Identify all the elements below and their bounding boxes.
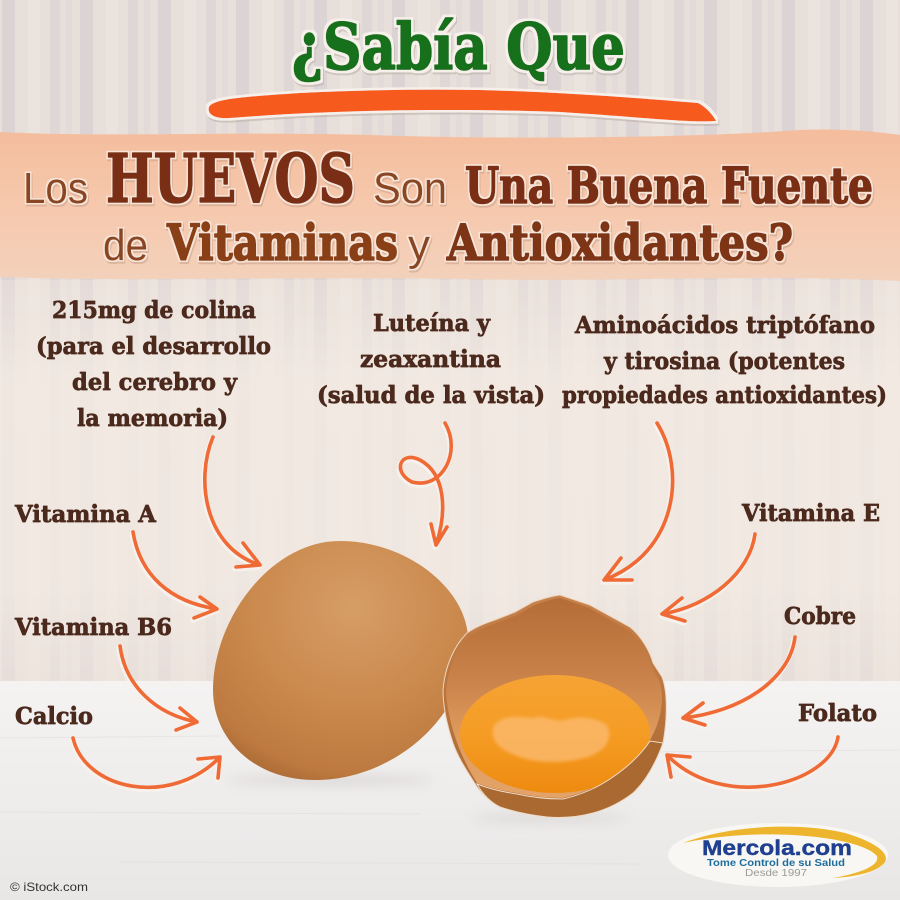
text block: colina: la memoria) bbox=[77, 404, 228, 432]
headline line 2: Vitaminas bbox=[166, 213, 398, 272]
whole brown egg bbox=[213, 541, 468, 785]
logo: Mercola.com bbox=[668, 823, 888, 887]
headline line 2: Antioxidantes? bbox=[446, 213, 793, 272]
logo tagline: Tome Control de su Salud bbox=[707, 857, 845, 869]
text block: colina bbox=[36, 296, 271, 432]
headline line 2: y bbox=[408, 221, 430, 270]
title: ¿Sabía Que bbox=[292, 10, 625, 85]
outer shell bbox=[443, 595, 666, 818]
arrow: Vitamina B6 bbox=[119, 646, 197, 732]
photo credit: © iStock.com bbox=[10, 880, 88, 894]
headline line 2: de bbox=[103, 221, 148, 270]
front shell lip bbox=[477, 741, 663, 818]
arrow: Cobre bbox=[682, 637, 795, 727]
text block: colina: del cerebro y bbox=[72, 368, 238, 396]
yolk bbox=[460, 675, 650, 793]
text block: luteína bbox=[317, 309, 545, 409]
text block: luteína: Luteína y bbox=[373, 309, 491, 337]
headline line 1: Los bbox=[23, 164, 88, 213]
text block: aminoácidos: Aminoácidos triptófano bbox=[574, 311, 875, 339]
background: white wooden table bbox=[0, 681, 900, 900]
logo year: Desde 1997 bbox=[745, 868, 807, 879]
headline band bbox=[0, 129, 900, 281]
arrow: aminoácidos to egg bbox=[603, 423, 673, 582]
label: Cobre: Cobre bbox=[784, 602, 856, 630]
orange brush underline bbox=[209, 90, 716, 121]
text block: aminoácidos bbox=[562, 311, 887, 409]
headline line 1: HUEVOS bbox=[106, 139, 355, 218]
arrow: Calcio bbox=[72, 738, 220, 789]
text block: colina: 215mg de colina bbox=[52, 296, 256, 324]
label: Vitamina E: Vitamina E bbox=[741, 499, 880, 527]
logo name: Mercola.com bbox=[702, 837, 852, 860]
cracked egg with yolk bbox=[443, 595, 666, 822]
label: Vitamina A: Vitamina A bbox=[14, 500, 157, 528]
arrow: colina to egg bbox=[204, 437, 260, 569]
label: Calcio: Calcio bbox=[15, 702, 93, 730]
logo swoosh bbox=[683, 827, 886, 878]
text block: aminoácidos: y tirosina (potentes bbox=[603, 347, 845, 375]
text block: luteína: (salud de la vista) bbox=[317, 381, 545, 409]
headline line 1 bbox=[23, 139, 873, 218]
shell interior bbox=[446, 598, 662, 798]
text block: colina: (para el desarrollo bbox=[36, 332, 271, 360]
headline line 2 bbox=[103, 213, 793, 272]
yolk highlight bbox=[493, 717, 609, 762]
label: Folato: Folato bbox=[798, 699, 877, 727]
arrow: Folato bbox=[666, 737, 838, 789]
label: Vitamina B6: Vitamina B6 bbox=[14, 613, 172, 641]
headline line 1: Son bbox=[373, 164, 447, 213]
arrow: Vitamina E bbox=[661, 534, 755, 623]
background: striped wall bbox=[0, 0, 900, 682]
arrow: Vitamina A bbox=[132, 532, 217, 620]
text block: luteína: zeaxantina bbox=[360, 345, 501, 373]
arrow: luteína loop bbox=[399, 423, 451, 547]
